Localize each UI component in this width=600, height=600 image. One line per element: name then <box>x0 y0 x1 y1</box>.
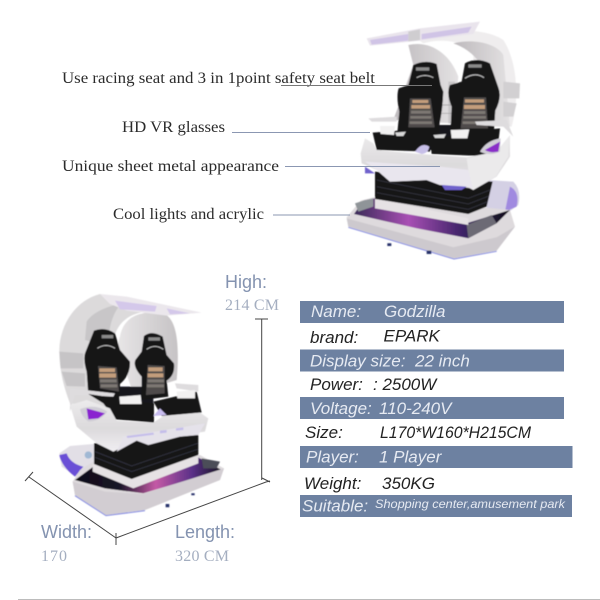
black column <box>375 172 493 214</box>
side ribs <box>503 82 520 117</box>
row: weight: 350KG <box>382 474 435 493</box>
dimension: width <box>25 472 116 565</box>
row: voltage <box>300 397 564 419</box>
seat right <box>448 60 500 142</box>
dimension: height: 214 CM <box>225 297 279 314</box>
canopy top panel <box>100 294 202 316</box>
canopy top panel <box>367 22 480 46</box>
row: voltage: Voltage: <box>310 399 372 418</box>
plinth <box>93 455 198 488</box>
seat left <box>397 62 443 143</box>
row: brand: brand: <box>310 328 358 347</box>
base rear wing <box>59 443 100 477</box>
row: display size: 22 inch <box>414 352 470 370</box>
seat right <box>135 333 174 400</box>
row: name: Godzilla <box>384 302 445 321</box>
dimension: width: 170 <box>41 548 67 565</box>
row: brand <box>310 326 441 347</box>
base platform <box>347 197 515 258</box>
row: size: Size: <box>305 423 343 442</box>
row: weight <box>304 474 435 493</box>
row: power: : 2500W <box>373 375 438 394</box>
dark gap between seats <box>120 387 153 407</box>
canopy shell <box>59 294 150 410</box>
row: power <box>310 375 438 394</box>
dimension: length <box>116 478 270 565</box>
row: display size <box>300 350 564 372</box>
row: name <box>300 301 564 323</box>
seat left <box>84 329 130 402</box>
armrests and VR glasses <box>368 117 513 137</box>
feet <box>387 243 431 254</box>
callout: VR glasses: HD VR glasses <box>122 119 225 136</box>
canopy rear shell <box>410 30 516 127</box>
callout: racing seat: Use racing seat and 3 in 1point safety seat belt <box>62 70 376 87</box>
callout: sheet metal: Unique sheet metal appearance <box>62 158 279 175</box>
machine: top two-seat VR egg chair <box>347 22 520 259</box>
base rear purple section <box>487 180 519 213</box>
row: suitable <box>300 495 572 517</box>
row: suitable: Suitable: <box>302 496 368 516</box>
row: player <box>300 446 572 468</box>
row: player: Player: <box>306 448 359 466</box>
white body <box>361 135 510 190</box>
dimension: width: Width: <box>41 522 92 542</box>
dimension: length: 320 CM <box>175 548 229 565</box>
armrests and VR glasses <box>70 383 198 412</box>
row: size: L170*W160*H215CM <box>380 423 532 442</box>
dimension: length: Length: <box>175 522 235 542</box>
row: display size: Display size: <box>310 352 406 370</box>
base platform <box>73 455 224 515</box>
row: voltage: 110-240V <box>379 399 453 418</box>
row: weight: Weight: <box>304 474 362 493</box>
dimension: height: High: <box>225 272 267 292</box>
row: suitable: Shopping center,amusement park <box>375 497 566 511</box>
bottom rule <box>18 598 600 600</box>
callout: lights: Cool lights and acrylic <box>113 206 264 223</box>
white body <box>70 400 208 452</box>
row: power: Power: <box>310 375 363 394</box>
plinth <box>375 198 468 225</box>
dimension: height <box>225 272 279 480</box>
row: size <box>305 423 532 442</box>
dark gap between seats <box>408 125 453 150</box>
row: name: Name: <box>311 302 361 321</box>
feet <box>166 493 195 507</box>
row: brand: EPARK <box>384 326 441 346</box>
machine: lower three-quarter view of chair <box>59 294 224 516</box>
row: player: 1 Player <box>379 448 443 466</box>
black column <box>94 433 198 479</box>
spec table <box>300 301 572 517</box>
